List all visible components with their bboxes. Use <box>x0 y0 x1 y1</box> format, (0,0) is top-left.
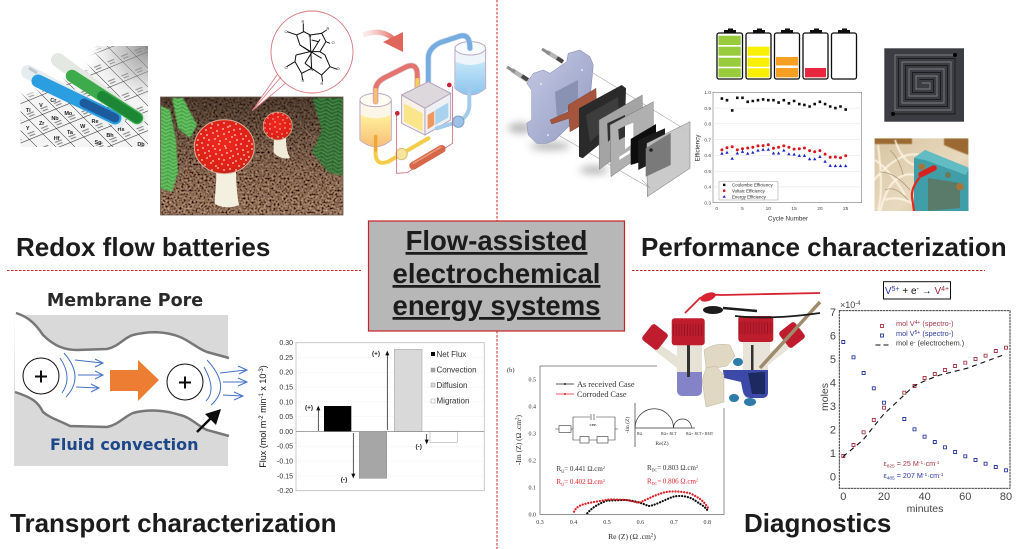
y axis labels: -0.05 <box>277 444 293 451</box>
sign labels <box>305 350 422 484</box>
photo border <box>160 97 343 215</box>
legend: 5+ <box>915 330 920 336</box>
photo: test tubes on periodic table: Ta <box>67 130 74 136</box>
legend <box>876 319 964 348</box>
callout: molecule in circle: R <box>321 81 324 86</box>
bar: net flux <box>324 406 351 432</box>
mini nyquist labels: RΩ <box>637 432 643 436</box>
label: fluid convection: Fluid convection <box>50 435 198 454</box>
resistance values: 2 <box>696 478 698 482</box>
axis title: min <box>258 398 268 415</box>
extinction coefficients: -1 <box>935 460 940 466</box>
photo: test tubes on periodic table: Y <box>26 126 30 132</box>
y axis labels: 0.7 <box>704 137 711 143</box>
leads <box>685 291 820 317</box>
axis title x: Re (Z) (Ω .cm <box>608 532 651 541</box>
extinction coefficients: ε <box>884 459 887 468</box>
panel: transport characterization <box>10 291 484 538</box>
photo: serpentine flow plate <box>884 48 964 122</box>
photo: test tubes on periodic table: Bh <box>106 133 114 139</box>
title text <box>393 225 600 321</box>
series: mol V4+ <box>842 346 1008 458</box>
legend: mol V <box>896 329 915 338</box>
frame 1 <box>599 95 642 169</box>
extinction coefficients: -1 <box>939 472 944 478</box>
extinction coefficients: = 207 M <box>895 471 923 480</box>
lower pipes and pumps <box>376 85 469 173</box>
callout: molecule in circle: R <box>302 78 305 83</box>
resistance values: 2 <box>696 464 698 469</box>
pore wall top <box>16 313 229 358</box>
axis title: Flux (mol m <box>258 421 268 468</box>
legend: Net Flux <box>436 350 466 359</box>
equation box: 4+ <box>941 286 949 293</box>
axis multiplier: ×10 <box>840 300 855 310</box>
battery low <box>803 28 828 79</box>
red lead <box>912 177 920 211</box>
copper plate <box>550 88 597 132</box>
photo: test tubes on periodic table <box>20 46 148 147</box>
y axis labels: 5 <box>830 354 836 366</box>
y axis labels: 0.10 <box>279 399 293 406</box>
diagram: exploded cell <box>507 49 690 197</box>
y axis labels: 0.1 <box>528 486 536 492</box>
small mushroom <box>263 112 292 158</box>
equation box: V <box>934 286 949 297</box>
legend: Migration <box>436 397 469 406</box>
axis title y: moles <box>819 383 831 411</box>
y axis labels: 6 <box>830 330 836 342</box>
panel: performance characterization <box>507 28 1007 262</box>
legend: As received Case <box>577 380 635 389</box>
twigs <box>245 130 343 190</box>
x axis labels: 60 <box>959 491 971 503</box>
diagram: membrane pore <box>14 313 247 466</box>
y axis labels: 0.00 <box>279 429 293 436</box>
extinction coefficients: ·cm <box>923 459 935 468</box>
ion left <box>23 358 59 394</box>
resistance values: 2 <box>603 478 605 483</box>
connector balls <box>729 358 756 406</box>
axis title y: 2 <box>516 417 520 420</box>
axis title x: 2 <box>651 534 654 538</box>
horizontal dashed divider right <box>632 270 985 272</box>
equivalent circuit <box>555 414 618 443</box>
title text: electrochemical <box>393 258 600 289</box>
orange flow arrow <box>110 360 159 401</box>
y axis labels: 0.20 <box>279 370 293 377</box>
blue pipe <box>428 36 470 88</box>
legend: Convection <box>436 366 477 375</box>
blue test tube <box>28 68 118 121</box>
title text: Flow-assisted <box>406 225 587 256</box>
green test tube <box>58 60 138 119</box>
bar: migration <box>430 432 457 442</box>
callout: molecule in circle: O <box>336 66 340 71</box>
frame 2 <box>610 102 653 177</box>
resistance values: DC <box>652 468 658 472</box>
series: voltaic efficiency <box>722 145 846 158</box>
end plate transparent <box>647 122 690 197</box>
axis title y: Efficiency <box>694 134 702 161</box>
callout: molecule in circle: O <box>284 65 288 70</box>
vertical dashed divider top <box>496 0 498 221</box>
x axis labels <box>715 206 849 212</box>
y axis labels: 0.8 <box>704 122 711 128</box>
sign labels: (+) <box>305 404 313 412</box>
y axis labels: 0.05 <box>279 414 293 421</box>
dark plate <box>646 133 671 177</box>
axis title x: Cycle Number <box>768 216 808 222</box>
pore wall bottom <box>15 392 229 436</box>
resistance values: 2 <box>603 465 605 470</box>
callout: molecule in circle: N <box>309 33 312 38</box>
legend <box>431 350 477 406</box>
mini nyquist labels: -Im (Z) <box>624 417 631 433</box>
resistance values: R <box>556 465 561 473</box>
heading: performance characterization: Performance characterization <box>641 232 1007 262</box>
brown rod <box>760 302 820 368</box>
y axis labels <box>830 307 836 484</box>
x axis labels: 0.5 <box>603 520 611 526</box>
resistance values: = 0.806 Ω.cm <box>657 478 696 486</box>
callout: molecule in circle: O <box>331 40 335 45</box>
legend: mol e <box>896 338 914 348</box>
mini nyquist labels: RΩ+ RCT <box>661 432 678 436</box>
legend: Diffusion <box>436 381 467 390</box>
white photo background <box>657 290 820 412</box>
chart: flux bars <box>258 340 484 495</box>
chart: moles vs minutes <box>819 300 1012 515</box>
series: energy efficiency <box>720 148 847 167</box>
y axis labels: 0.30 <box>279 340 293 347</box>
y axis labels: 3 <box>830 401 836 413</box>
cap ribs <box>673 328 773 330</box>
y axis labels: 0.0 <box>528 512 536 518</box>
callout: molecule in circle: O <box>284 29 288 34</box>
panel: title box <box>368 221 624 331</box>
field arcs right <box>204 360 247 405</box>
x axis labels: 5 <box>741 206 744 212</box>
y axis labels: 7 <box>830 307 836 319</box>
field arcs left <box>60 353 103 397</box>
bar: diffusion <box>394 349 422 432</box>
title text: energy systems <box>393 290 600 321</box>
axis title: -1 <box>259 392 265 398</box>
x axis labels: 15 <box>791 206 797 212</box>
callout: molecule in circle: R <box>302 19 305 24</box>
extinction coefficients: -1 <box>923 472 928 478</box>
fern left <box>160 98 197 192</box>
resistance values: Ω <box>561 468 564 474</box>
extinction coefficients: 825 <box>887 464 895 470</box>
y axis labels: 4 <box>830 378 836 390</box>
chart: efficiency vs cycle number <box>694 90 862 222</box>
vertical dashed divider bottom <box>496 331 498 549</box>
x axis labels: 0.8 <box>704 520 711 526</box>
axis title x: minutes <box>907 503 943 515</box>
mini nyquist labels: Re(Z) <box>655 440 669 447</box>
black pointer arrow <box>197 409 221 432</box>
photo: test tubes on periodic table: Ti <box>26 108 31 114</box>
callout: molecule in circle <box>252 11 353 111</box>
y axis labels: 0.25 <box>279 355 293 362</box>
legend: Coulombic Efficiency <box>732 183 773 188</box>
chart: impedance nyquist plot: (b) <box>507 367 515 374</box>
y axis labels <box>277 340 293 495</box>
battery full <box>717 28 742 79</box>
panel: diagnostics <box>507 282 1012 541</box>
big mushroom <box>194 120 254 207</box>
resistance values: R <box>647 464 652 472</box>
axis title: x 10 <box>258 374 268 393</box>
y axis labels: 0.15 <box>279 384 293 392</box>
axis title: -2 <box>259 415 265 421</box>
y axis labels: 0.9 <box>704 106 711 112</box>
photo: test tubes on periodic table: Cr <box>50 98 57 104</box>
end plate <box>527 50 593 143</box>
ion right <box>167 364 203 400</box>
x axis labels: 10 <box>766 206 771 212</box>
carbon felts <box>631 124 656 165</box>
photo: test tubes on periodic table: Mo <box>64 111 73 117</box>
x axis labels: 0.7 <box>670 520 678 526</box>
curve: corroded <box>574 491 708 512</box>
legend: - <box>914 340 916 346</box>
x axis labels: 0.3 <box>536 520 544 526</box>
dark gasket <box>579 85 626 158</box>
y axis labels: -0.20 <box>277 488 293 495</box>
y axis labels: -0.10 <box>277 458 293 466</box>
y axis labels: 0.5 <box>704 169 711 175</box>
sign labels: (-) <box>341 476 347 484</box>
extinction coefficients <box>884 459 944 482</box>
x axis labels <box>536 520 711 526</box>
sign labels: (-) <box>415 444 422 450</box>
photo: test tubes on periodic table: Sg <box>94 140 102 146</box>
resistance values: = 0.803 Ω.cm <box>657 464 696 472</box>
y axis labels: 1 <box>830 448 836 460</box>
panel: redox flow batteries <box>10 11 486 262</box>
battery three quarters <box>746 28 771 79</box>
photo: test tubes on periodic table: Hf <box>54 136 60 142</box>
resistance values: = 0.441 Ω.cm <box>564 465 603 473</box>
axis title y: -Im (Z) (Ω .cm <box>514 420 523 465</box>
y axis labels: 0 <box>830 472 836 484</box>
heading: transport characterization: Transport characterization <box>10 508 337 538</box>
photo: red mushrooms <box>160 97 343 215</box>
extinction coefficients: 485 <box>887 476 895 482</box>
icon: battery levels <box>717 28 856 79</box>
shadows of exploded cell <box>508 123 608 174</box>
extinction coefficients: ·cm <box>927 471 939 480</box>
resistance values: = 0.402 Ω.cm <box>564 478 603 486</box>
resistance values: DC <box>652 481 658 486</box>
mini nyquist labels <box>624 417 714 447</box>
photo: test tubes on periodic table: W <box>80 124 86 130</box>
x axis labels: 0 <box>715 206 718 212</box>
y axis labels: 0.3 <box>528 432 536 438</box>
x axis labels: 0.4 <box>570 520 577 526</box>
x axis labels <box>840 491 1012 503</box>
left electrolyte tank <box>360 93 391 147</box>
y axis labels: 0.4 <box>528 404 536 410</box>
heading: membrane pore: Membrane Pore <box>47 291 203 311</box>
y axis labels: 0.3 <box>704 200 711 206</box>
legend: 4+ <box>915 320 920 326</box>
legend: Corroded Case <box>577 390 627 399</box>
battery half <box>774 28 800 79</box>
photo: test tubes on periodic table: Db <box>137 142 145 148</box>
x axis labels: 0 <box>840 491 846 503</box>
legend: Energy Efficiency <box>732 194 767 200</box>
axis title: -3 <box>259 368 265 374</box>
extinction coefficients: ε <box>884 471 887 480</box>
series: mol V5+ <box>842 340 1008 472</box>
y axis labels: 0.4 <box>704 185 711 191</box>
guide lines <box>553 73 686 188</box>
photo: electrochemical H-cell <box>641 290 820 412</box>
connectors <box>507 49 563 80</box>
callout: molecule in circle: R <box>327 26 330 31</box>
diagram: flow battery <box>360 36 486 173</box>
y axis labels: 0.5 <box>528 378 536 384</box>
mini nyquist labels: RΩ+ RCT+ RMT <box>686 432 714 436</box>
chart: impedance nyquist plot <box>507 366 724 541</box>
series: mol electrons <box>843 354 1006 457</box>
axis title y: ) <box>514 414 523 417</box>
heading: diagnostics: Diagnostics <box>744 508 891 538</box>
fern right <box>312 98 343 176</box>
axis multiplier: -4 <box>855 301 861 307</box>
x axis labels: 40 <box>918 491 931 503</box>
beige clip <box>702 344 735 407</box>
series: coulombic efficiency <box>722 98 846 110</box>
sign labels: (+) <box>372 350 380 358</box>
photo: test tubes on periodic table: Hs <box>117 127 125 133</box>
horizontal dashed divider left <box>7 270 361 272</box>
equation box: → <box>919 286 934 297</box>
equation box: - <box>917 286 920 293</box>
x axis labels: 25 <box>843 206 849 212</box>
legend: (spectro-) <box>920 329 954 338</box>
red caps <box>641 316 806 351</box>
axis title x: ) <box>653 532 656 541</box>
teal cell body <box>914 150 969 211</box>
equation box: V <box>885 286 900 297</box>
y axis labels: 0.2 <box>528 458 536 464</box>
photo: flow cell on bench <box>874 138 969 212</box>
y axis labels: -0.15 <box>277 473 293 480</box>
electrode terminals <box>395 83 452 116</box>
photo: test tubes on periodic table: V <box>39 103 43 109</box>
legend: mol V <box>896 319 915 328</box>
resistance values <box>556 464 698 486</box>
resistance values: R <box>556 478 561 486</box>
resistance values: Ω <box>561 482 564 486</box>
equation box: 5+ <box>892 286 900 293</box>
bar: convection <box>359 432 387 478</box>
y axis labels: 1.0 <box>704 90 711 96</box>
photo: test tubes on periodic table: Nb <box>51 116 59 122</box>
red pipe <box>376 66 417 102</box>
x axis labels: 80 <box>1000 491 1012 503</box>
heading: redox flow batteries: Redox flow batteries <box>16 232 270 262</box>
pore channel <box>14 313 228 436</box>
y axis labels <box>704 90 711 206</box>
y axis labels: 0.6 <box>704 153 711 159</box>
y axis labels <box>528 378 536 518</box>
equation box <box>884 282 950 299</box>
extinction coefficients: -1 <box>919 460 924 466</box>
left vial <box>654 344 702 396</box>
cell stack <box>402 82 451 135</box>
resistance values: R <box>647 478 652 486</box>
right electrolyte tank <box>455 42 486 95</box>
x axis labels: 20 <box>817 206 823 212</box>
equation box: + e <box>900 286 917 297</box>
x axis labels: 20 <box>878 491 890 503</box>
right vial <box>723 342 790 398</box>
callout: molecule in circle: N <box>311 67 314 72</box>
arrow: curved red <box>363 32 403 52</box>
mini nyquist schematic <box>635 403 695 447</box>
axis title: ) <box>258 365 268 368</box>
legend <box>556 380 635 399</box>
battery empty <box>832 28 856 79</box>
photo: test tubes on periodic table: Zr <box>39 121 45 127</box>
curve: as received <box>587 496 707 513</box>
x axis labels: 0.6 <box>637 520 644 526</box>
chart: impedance nyquist plot: CPE <box>590 423 597 427</box>
legend <box>719 182 778 200</box>
photo: test tubes on periodic table: Re <box>91 119 99 125</box>
legend: Voltaic Efficiency <box>732 189 766 194</box>
legend: (spectro-) <box>920 319 954 328</box>
legend: (electrochem.) <box>916 338 964 348</box>
y axis labels: 2 <box>830 424 836 436</box>
extinction coefficients: = 25 M <box>895 459 919 468</box>
sign arrows <box>317 352 428 478</box>
